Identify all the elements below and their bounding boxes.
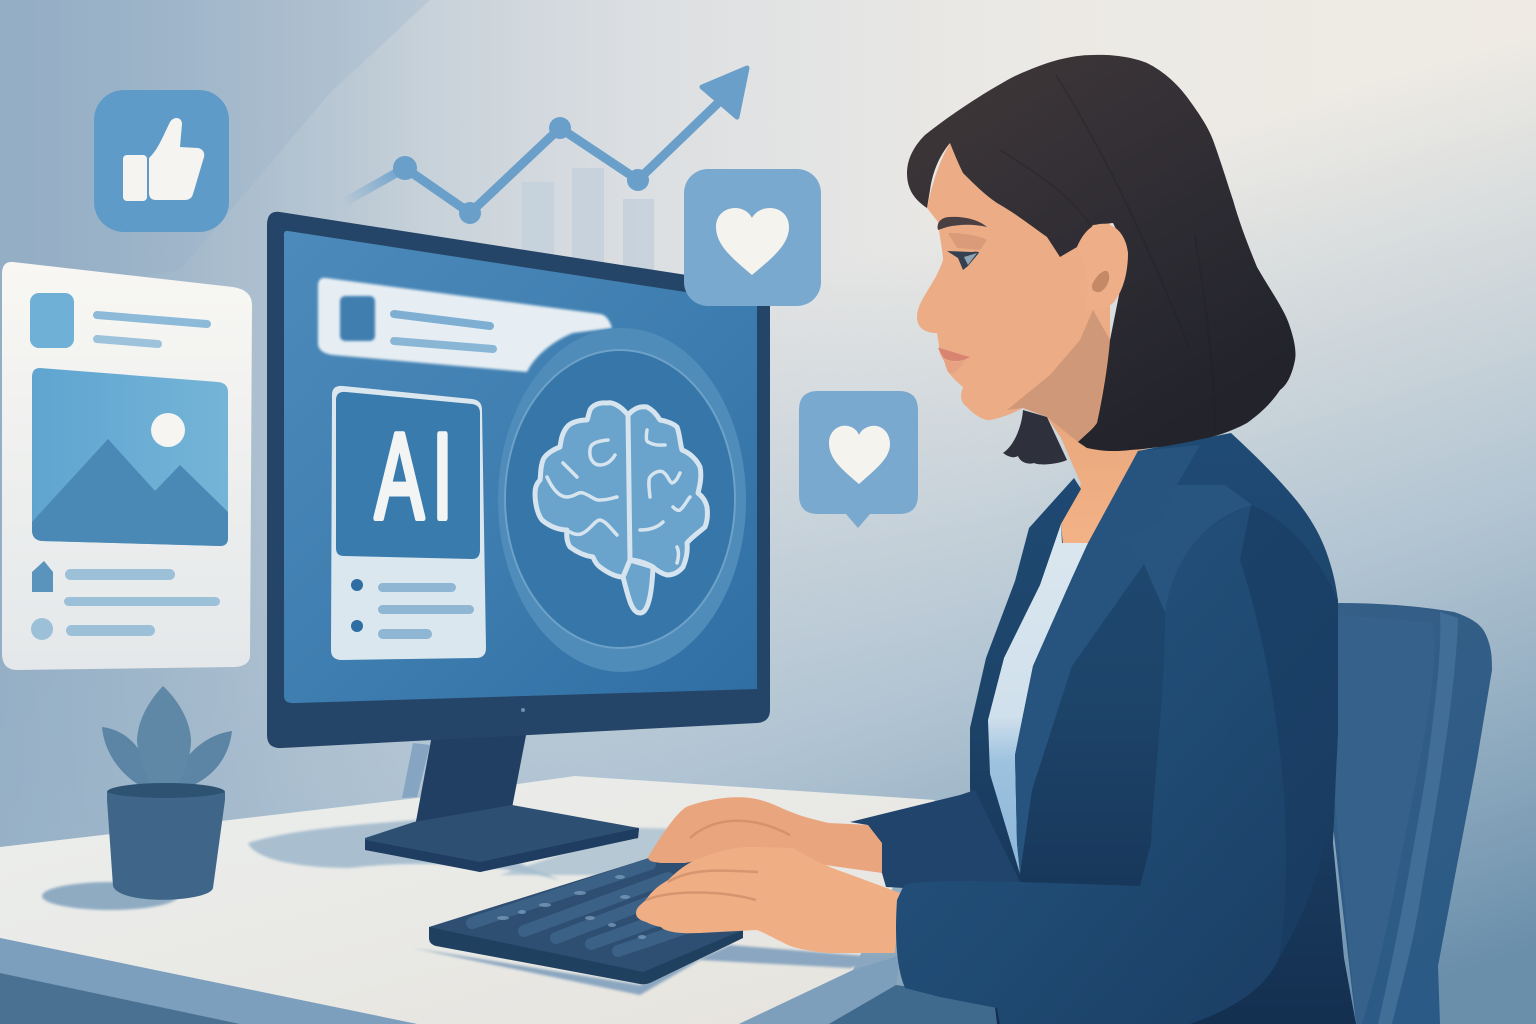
potted plant [102,686,232,900]
desk shadows [42,820,890,995]
icon: brain [535,403,707,613]
lips [938,348,970,374]
woman [907,55,1356,1024]
hands [636,797,900,953]
blazer far sleeve [850,790,1020,888]
monitor stand [365,725,639,872]
screen header card [318,278,612,372]
blazer near sleeve [896,505,1338,1024]
jaw shadow [1007,310,1110,442]
monitor screen [284,231,757,703]
face [917,143,1110,442]
trend arrow [343,68,747,224]
AI card list [351,579,474,639]
blazer lapels [1015,445,1200,874]
brow [938,217,987,230]
faint bar chart behind monitor [522,168,654,274]
icon: heart tile [684,169,821,306]
blouse [988,524,1088,874]
post footer [31,561,220,640]
monitor bezel [267,212,770,748]
post image [32,368,228,546]
neck [1023,310,1145,545]
post avatar [30,293,74,348]
monitor power dot [521,708,525,712]
icon: heart speech bubble [799,391,918,528]
AI card: AI [375,409,461,545]
keyboard [429,842,760,984]
hair tuft behind neck [1003,410,1067,464]
AI card [331,386,486,660]
blazer [970,433,1356,1024]
hand: near [636,847,900,953]
shoulder highlight [1122,485,1252,612]
ear [1077,224,1128,310]
hand: far [648,797,882,873]
social post card [2,262,252,670]
eye [947,251,979,270]
hair front [907,55,1295,451]
desk [0,776,1000,1024]
chair [1330,603,1492,1024]
brain lens [498,328,746,672]
icon: thumbs up [94,90,229,232]
monitor [267,212,770,872]
eyelid shading [948,233,987,250]
post title lines [97,315,207,344]
